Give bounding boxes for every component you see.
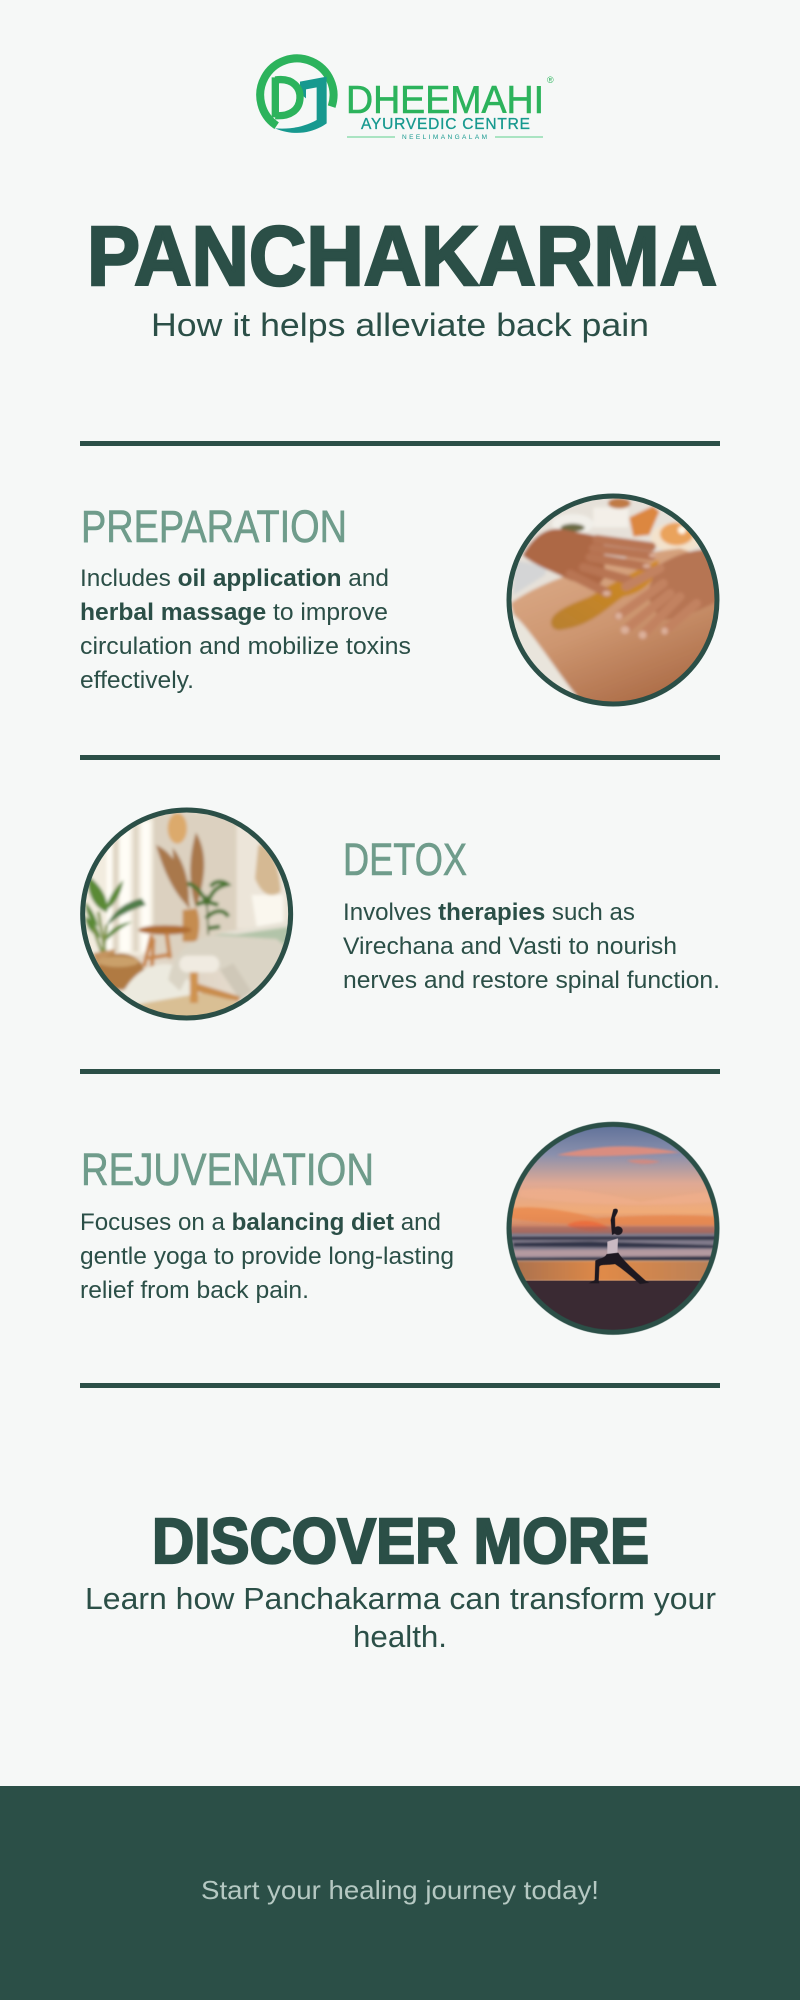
nails — [603, 553, 668, 639]
heading: rejuvenation: REJUVENATION — [81, 1144, 374, 1195]
text: detox: Virechana and Vasti to nourish — [343, 933, 677, 960]
right hand — [649, 548, 714, 620]
footer text: Start your healing journey today! — [201, 1875, 599, 1905]
text: rejuvenation — [80, 1209, 454, 1304]
text: call to action: health. — [353, 1619, 447, 1654]
bed — [168, 938, 283, 990]
text: rejuvenation: gentle yoga to provide long-lasting — [80, 1243, 454, 1270]
section: detox — [80, 808, 720, 1022]
text: detox: Involves therapies such as — [343, 899, 635, 926]
left hand — [523, 529, 605, 588]
logo mark — [260, 58, 334, 133]
logo registered mark: ® — [547, 75, 554, 85]
text: preparation: effectively. — [80, 667, 194, 694]
heading: discover more: DISCOVER MORE — [152, 1505, 649, 1577]
subtitle: How it helps alleviate back pain — [151, 307, 649, 343]
text: preparation: herbal massage to improve — [80, 599, 388, 626]
text: call to action: Learn how Panchakarma can transform your — [85, 1581, 716, 1616]
logo wordmark: DHEEMAHI — [346, 79, 544, 122]
plant — [85, 875, 146, 943]
logo tagline: AYURVEDIC CENTRE — [361, 116, 530, 133]
heading: preparation: PREPARATION — [81, 501, 347, 552]
text: preparation — [80, 565, 411, 694]
text: preparation: Includes oil application and — [80, 565, 389, 592]
photo: yoga at sunset — [503, 1120, 723, 1337]
section: preparation — [80, 493, 723, 713]
text: preparation: circulation and mobilize toxins — [80, 633, 411, 660]
title: PANCHAKARMA — [87, 209, 717, 303]
section: rejuvenation — [80, 1120, 723, 1337]
heading: detox: DETOX — [343, 834, 467, 885]
logo location: NEELIMANGALAM — [402, 134, 487, 141]
footer — [0, 1786, 800, 2000]
text: call to action — [85, 1581, 716, 1654]
photo: oil massage — [503, 493, 723, 713]
text: detox: nerves and restore spinal function. — [343, 967, 720, 994]
logo — [260, 58, 554, 141]
text: rejuvenation: Focuses on a balancing diet and — [80, 1209, 441, 1236]
yoga figure — [589, 1209, 649, 1284]
text: detox — [343, 899, 720, 994]
text: rejuvenation: relief from back pain. — [80, 1277, 309, 1304]
photo: treatment room — [80, 808, 293, 1022]
